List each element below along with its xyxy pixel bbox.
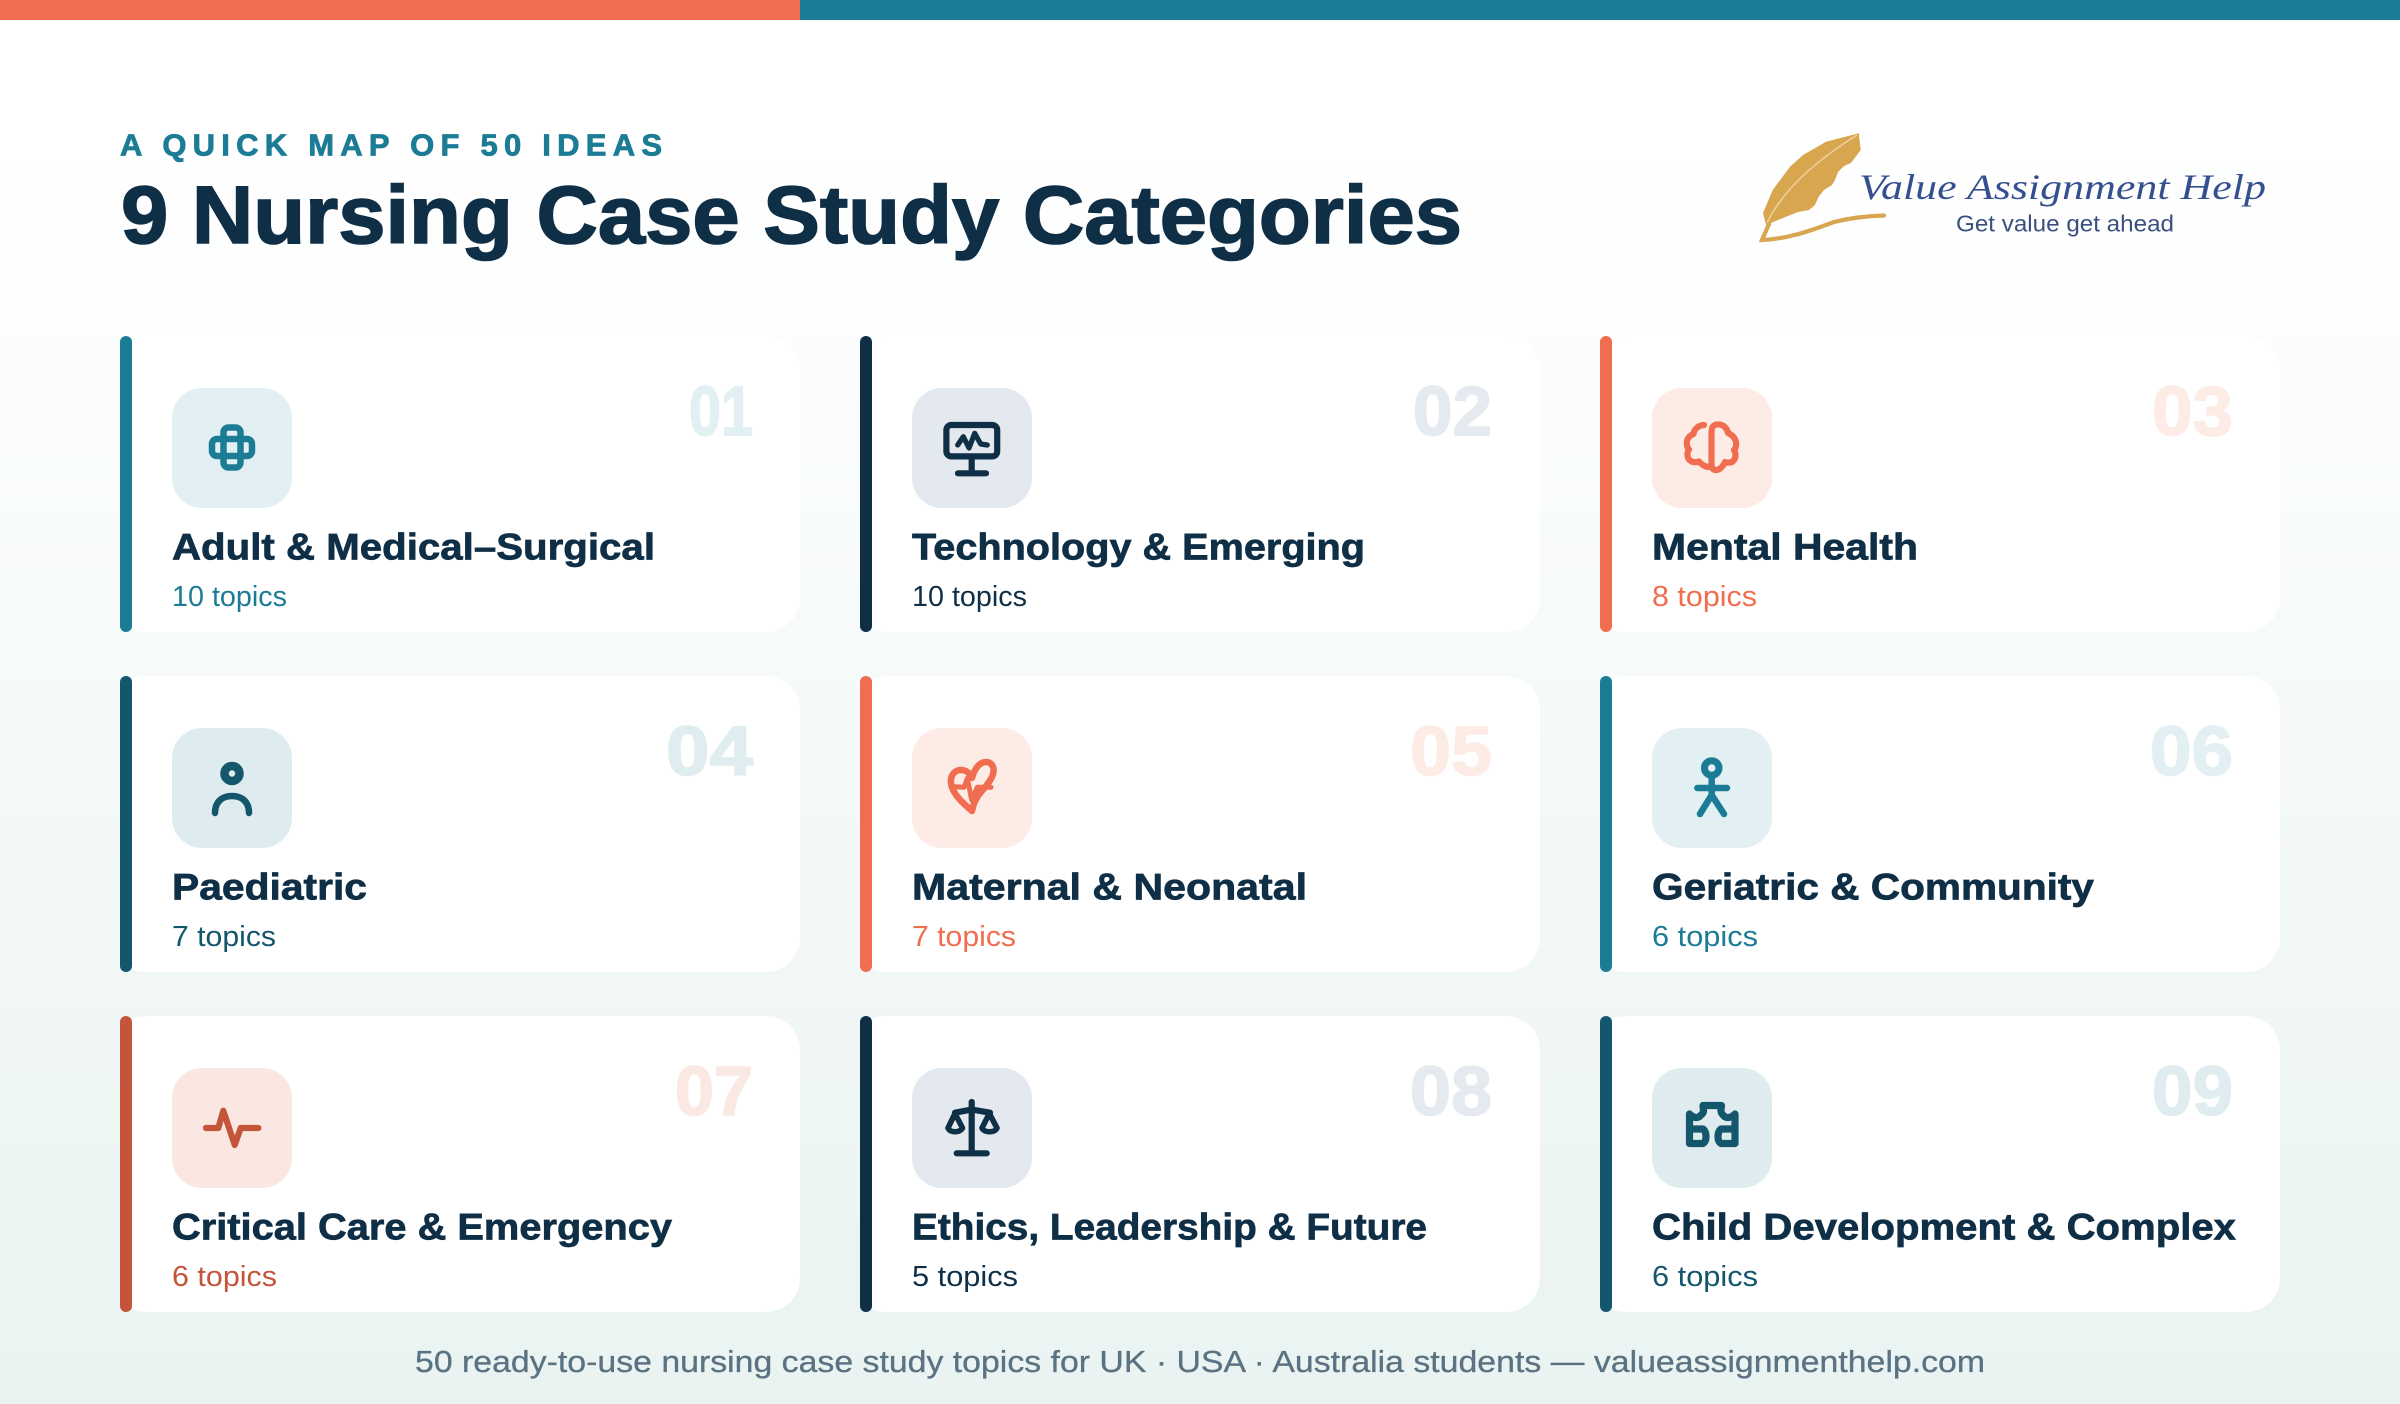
number: 06 xyxy=(2150,712,2233,790)
category name: Child Development & Complex xyxy=(1652,1206,2236,1248)
icon: puzzle piece xyxy=(1652,1068,1772,1188)
accent bar xyxy=(1600,1016,1612,1312)
card 04: Paediatric xyxy=(120,676,800,972)
category name: Mental Health xyxy=(1652,526,1918,568)
card panel xyxy=(872,336,1540,632)
card panel xyxy=(1612,336,2280,632)
card 09: Child Development & Complex xyxy=(1600,1016,2280,1312)
icon: feather quill xyxy=(1762,133,1884,240)
card panel xyxy=(132,336,800,632)
accent bar xyxy=(1600,676,1612,972)
card panel xyxy=(872,1016,1540,1312)
category name: Paediatric xyxy=(172,866,367,908)
icon: pulse line xyxy=(172,1068,292,1188)
logo: Value Assignment Help xyxy=(1762,133,2266,240)
accent bar xyxy=(860,1016,872,1312)
icon: heart with pulse xyxy=(912,728,1032,848)
topic count: 7 topics xyxy=(172,921,276,953)
topic count: 10 topics xyxy=(912,581,1027,613)
topic count: 5 topics xyxy=(912,1261,1018,1293)
card 05: Maternal & Neonatal xyxy=(860,676,1540,972)
number: 05 xyxy=(1410,712,1492,790)
category name: Critical Care & Emergency xyxy=(172,1206,672,1248)
card panel xyxy=(872,676,1540,972)
card panel xyxy=(132,676,800,972)
icon: brain xyxy=(1652,388,1772,508)
card 03: Mental Health xyxy=(1600,336,2280,632)
icon: standing person xyxy=(1652,728,1772,848)
title: 9 Nursing Case Study Categories xyxy=(121,170,1462,261)
card 07: Critical Care & Emergency xyxy=(120,1016,800,1312)
number: 01 xyxy=(689,372,753,450)
category name: Ethics, Leadership & Future xyxy=(912,1206,1427,1248)
icon: child figure xyxy=(172,728,292,848)
card panel xyxy=(1612,1016,2280,1312)
footer note: 50 ready-to-use nursing case study topics for UK · USA · Australia students — valueassignmenthelp.com xyxy=(415,1344,1985,1379)
topic count: 6 topics xyxy=(172,1261,277,1293)
topic count: 6 topics xyxy=(1652,1261,1758,1293)
icon: medical cross xyxy=(172,388,292,508)
accent bar xyxy=(1600,336,1612,632)
accent bar xyxy=(860,676,872,972)
category name: Technology & Emerging xyxy=(912,526,1365,568)
accent bar xyxy=(120,676,132,972)
accent bar xyxy=(120,336,132,632)
topic count: 6 topics xyxy=(1652,921,1758,953)
top accent bar xyxy=(0,0,2400,20)
card 02: Technology & Emerging xyxy=(860,336,1540,632)
topic count: 8 topics xyxy=(1652,581,1757,613)
number: 09 xyxy=(2152,1052,2233,1130)
eyebrow heading: A QUICK MAP OF 50 IDEAS xyxy=(120,128,662,162)
category name: Adult & Medical–Surgical xyxy=(172,526,655,568)
logo wordmark: Value Assignment Help xyxy=(1859,167,2266,207)
icon: scales xyxy=(912,1068,1032,1188)
number: 04 xyxy=(666,712,753,790)
card 01: Adult & Medical–Surgical xyxy=(120,336,800,632)
number: 02 xyxy=(1413,372,1492,450)
topic count: 7 topics xyxy=(912,921,1016,953)
icon: monitor with pulse xyxy=(912,388,1032,508)
category name: Geriatric & Community xyxy=(1652,866,2094,908)
card 06: Geriatric & Community xyxy=(1600,676,2280,972)
number: 03 xyxy=(2152,372,2233,450)
card 08: Ethics, Leadership & Future xyxy=(860,1016,1540,1312)
category name: Maternal & Neonatal xyxy=(912,866,1307,908)
card panel xyxy=(132,1016,800,1312)
number: 07 xyxy=(675,1052,753,1130)
topic count: 10 topics xyxy=(172,581,287,613)
card panel xyxy=(1612,676,2280,972)
accent bar xyxy=(120,1016,132,1312)
accent bar xyxy=(860,336,872,632)
logo tagline: Get value get ahead xyxy=(1956,210,2174,236)
number: 08 xyxy=(1410,1052,1492,1130)
